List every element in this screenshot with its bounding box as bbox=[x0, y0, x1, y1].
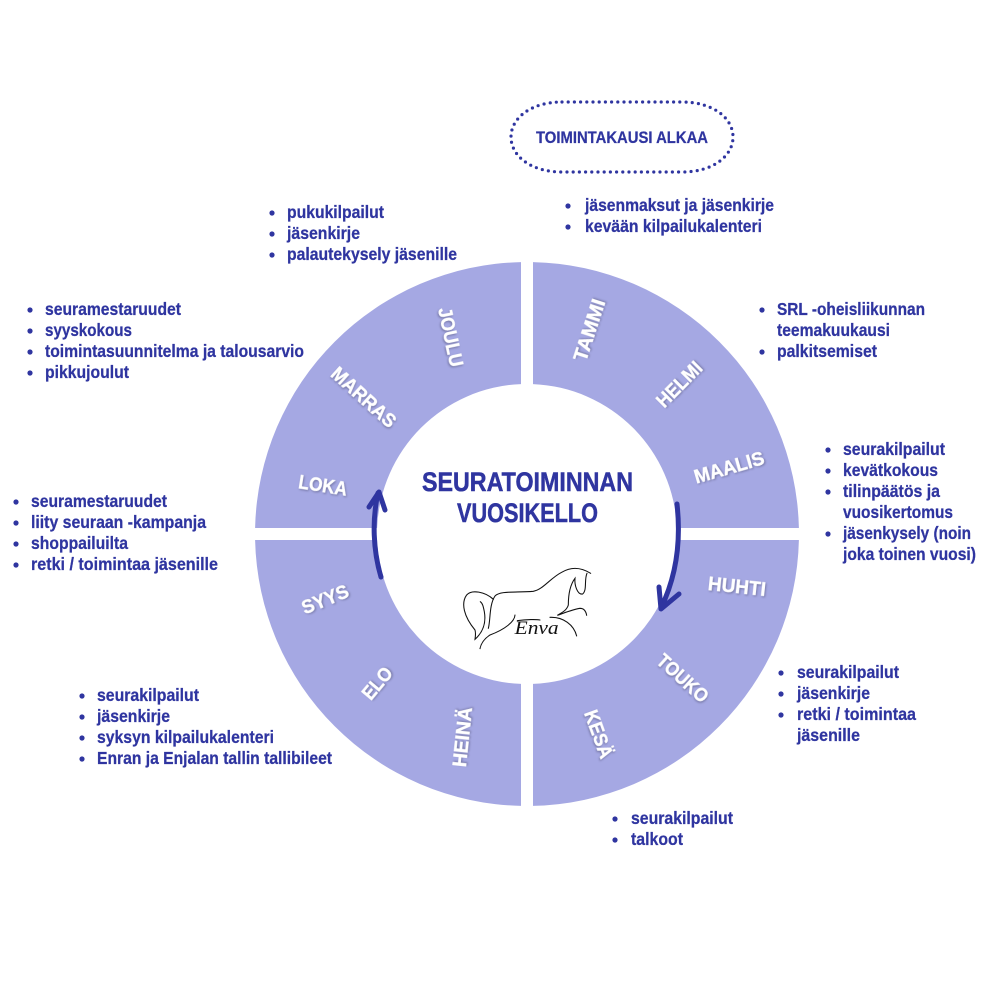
callout: toimintakausi alkaa: TOIMINTAKAUSI ALKAA bbox=[536, 128, 708, 147]
list: elo bbox=[79, 685, 332, 768]
ring quadrant: bottom left bbox=[255, 540, 521, 806]
list: maalis: seurakilpailut bbox=[843, 439, 945, 459]
list: touko bbox=[778, 662, 916, 745]
list: elo: jäsenkirje bbox=[96, 706, 170, 726]
month: LOKA: LOKA bbox=[297, 471, 349, 501]
title bbox=[422, 467, 633, 528]
month: HEINÄ: HEINÄ bbox=[448, 706, 477, 768]
list: syys: retki / toimintaa jäsenille bbox=[31, 554, 218, 574]
month: HUHTI: HUHTI bbox=[707, 573, 767, 601]
list: loka bbox=[27, 299, 304, 382]
list: kesä bbox=[612, 808, 733, 849]
list: tammi: kevään kilpailukalenteri bbox=[585, 216, 762, 236]
list: joulu: jäsenkirje bbox=[286, 223, 360, 243]
list: syys: seuramestaruudet bbox=[31, 491, 167, 511]
callout: toimintakausi alkaa bbox=[511, 102, 733, 172]
list: touko: jäsenkirje bbox=[796, 683, 870, 703]
month: JOULU: JOULU bbox=[433, 306, 467, 369]
list: joulu bbox=[269, 202, 457, 264]
list: maalis: joka toinen vuosi) bbox=[842, 544, 976, 564]
list: maalis: kevätkokous bbox=[843, 460, 938, 480]
month: ELO: ELO bbox=[358, 663, 398, 705]
month: TAMMI: TAMMI bbox=[570, 296, 610, 364]
list: helmi: palkitsemiset bbox=[777, 341, 877, 361]
list: loka: toimintasuunnitelma ja talousarvio bbox=[45, 341, 304, 361]
list: elo: Enran ja Enjalan tallin tallibileet bbox=[97, 748, 332, 768]
list: loka: seuramestaruudet bbox=[45, 299, 181, 319]
arrow: spring clockwise bbox=[659, 504, 679, 609]
ring quadrant: top left bbox=[255, 262, 521, 528]
list: elo: syksyn kilpailukalenteri bbox=[97, 727, 274, 747]
list: helmi: teemakuukausi bbox=[777, 320, 890, 340]
month: HELMI: HELMI bbox=[652, 357, 707, 412]
list: loka: pikkujoulut bbox=[45, 362, 129, 382]
list: maalis: jäsenkysely (noin bbox=[842, 523, 971, 543]
list: maalis bbox=[825, 439, 976, 564]
list: touko: retki / toimintaa bbox=[797, 704, 916, 724]
list: helmi: SRL -oheisliikunnan bbox=[777, 299, 925, 319]
ring quadrant: bottom right bbox=[533, 540, 799, 806]
list: syys: liity seuraan -kampanja bbox=[31, 512, 206, 532]
list: syys bbox=[13, 491, 218, 574]
ring diagram bbox=[255, 262, 799, 806]
list: kesä: talkoot bbox=[631, 829, 683, 849]
ring quadrant: top right bbox=[533, 262, 799, 528]
list: touko: seurakilpailut bbox=[797, 662, 899, 682]
month labels bbox=[297, 296, 767, 768]
list: syys: shoppailuilta bbox=[31, 533, 128, 553]
month: MAALIS: MAALIS bbox=[692, 447, 767, 488]
list: joulu: pukukilpailut bbox=[287, 202, 384, 222]
month: MARRAS: MARRAS bbox=[326, 363, 400, 433]
list: elo: seurakilpailut bbox=[97, 685, 199, 705]
list: loka: syyskokous bbox=[45, 320, 132, 340]
month: TOUKO: TOUKO bbox=[652, 650, 713, 708]
logo wordmark: Enva bbox=[514, 618, 559, 639]
list: maalis: vuosikertomus bbox=[843, 502, 953, 522]
list: maalis: tilinpäätös ja bbox=[843, 481, 940, 501]
month: KESÄ: KESÄ bbox=[579, 707, 618, 762]
list: helmi bbox=[759, 299, 925, 361]
list: tammi bbox=[565, 195, 774, 236]
list: touko: jäsenille bbox=[796, 725, 860, 745]
month: SYYS: SYYS bbox=[299, 581, 352, 619]
logo: Envia horse bbox=[464, 568, 591, 649]
title: SEURATOIMINNAN bbox=[422, 467, 633, 497]
list: tammi: jäsenmaksut ja jäsenkirje bbox=[584, 195, 774, 215]
list: kesä: seurakilpailut bbox=[631, 808, 733, 828]
title: VUOSIKELLO bbox=[457, 498, 598, 528]
list: joulu: palautekysely jäsenille bbox=[287, 244, 457, 264]
arrow: autumn upward bbox=[369, 492, 385, 577]
